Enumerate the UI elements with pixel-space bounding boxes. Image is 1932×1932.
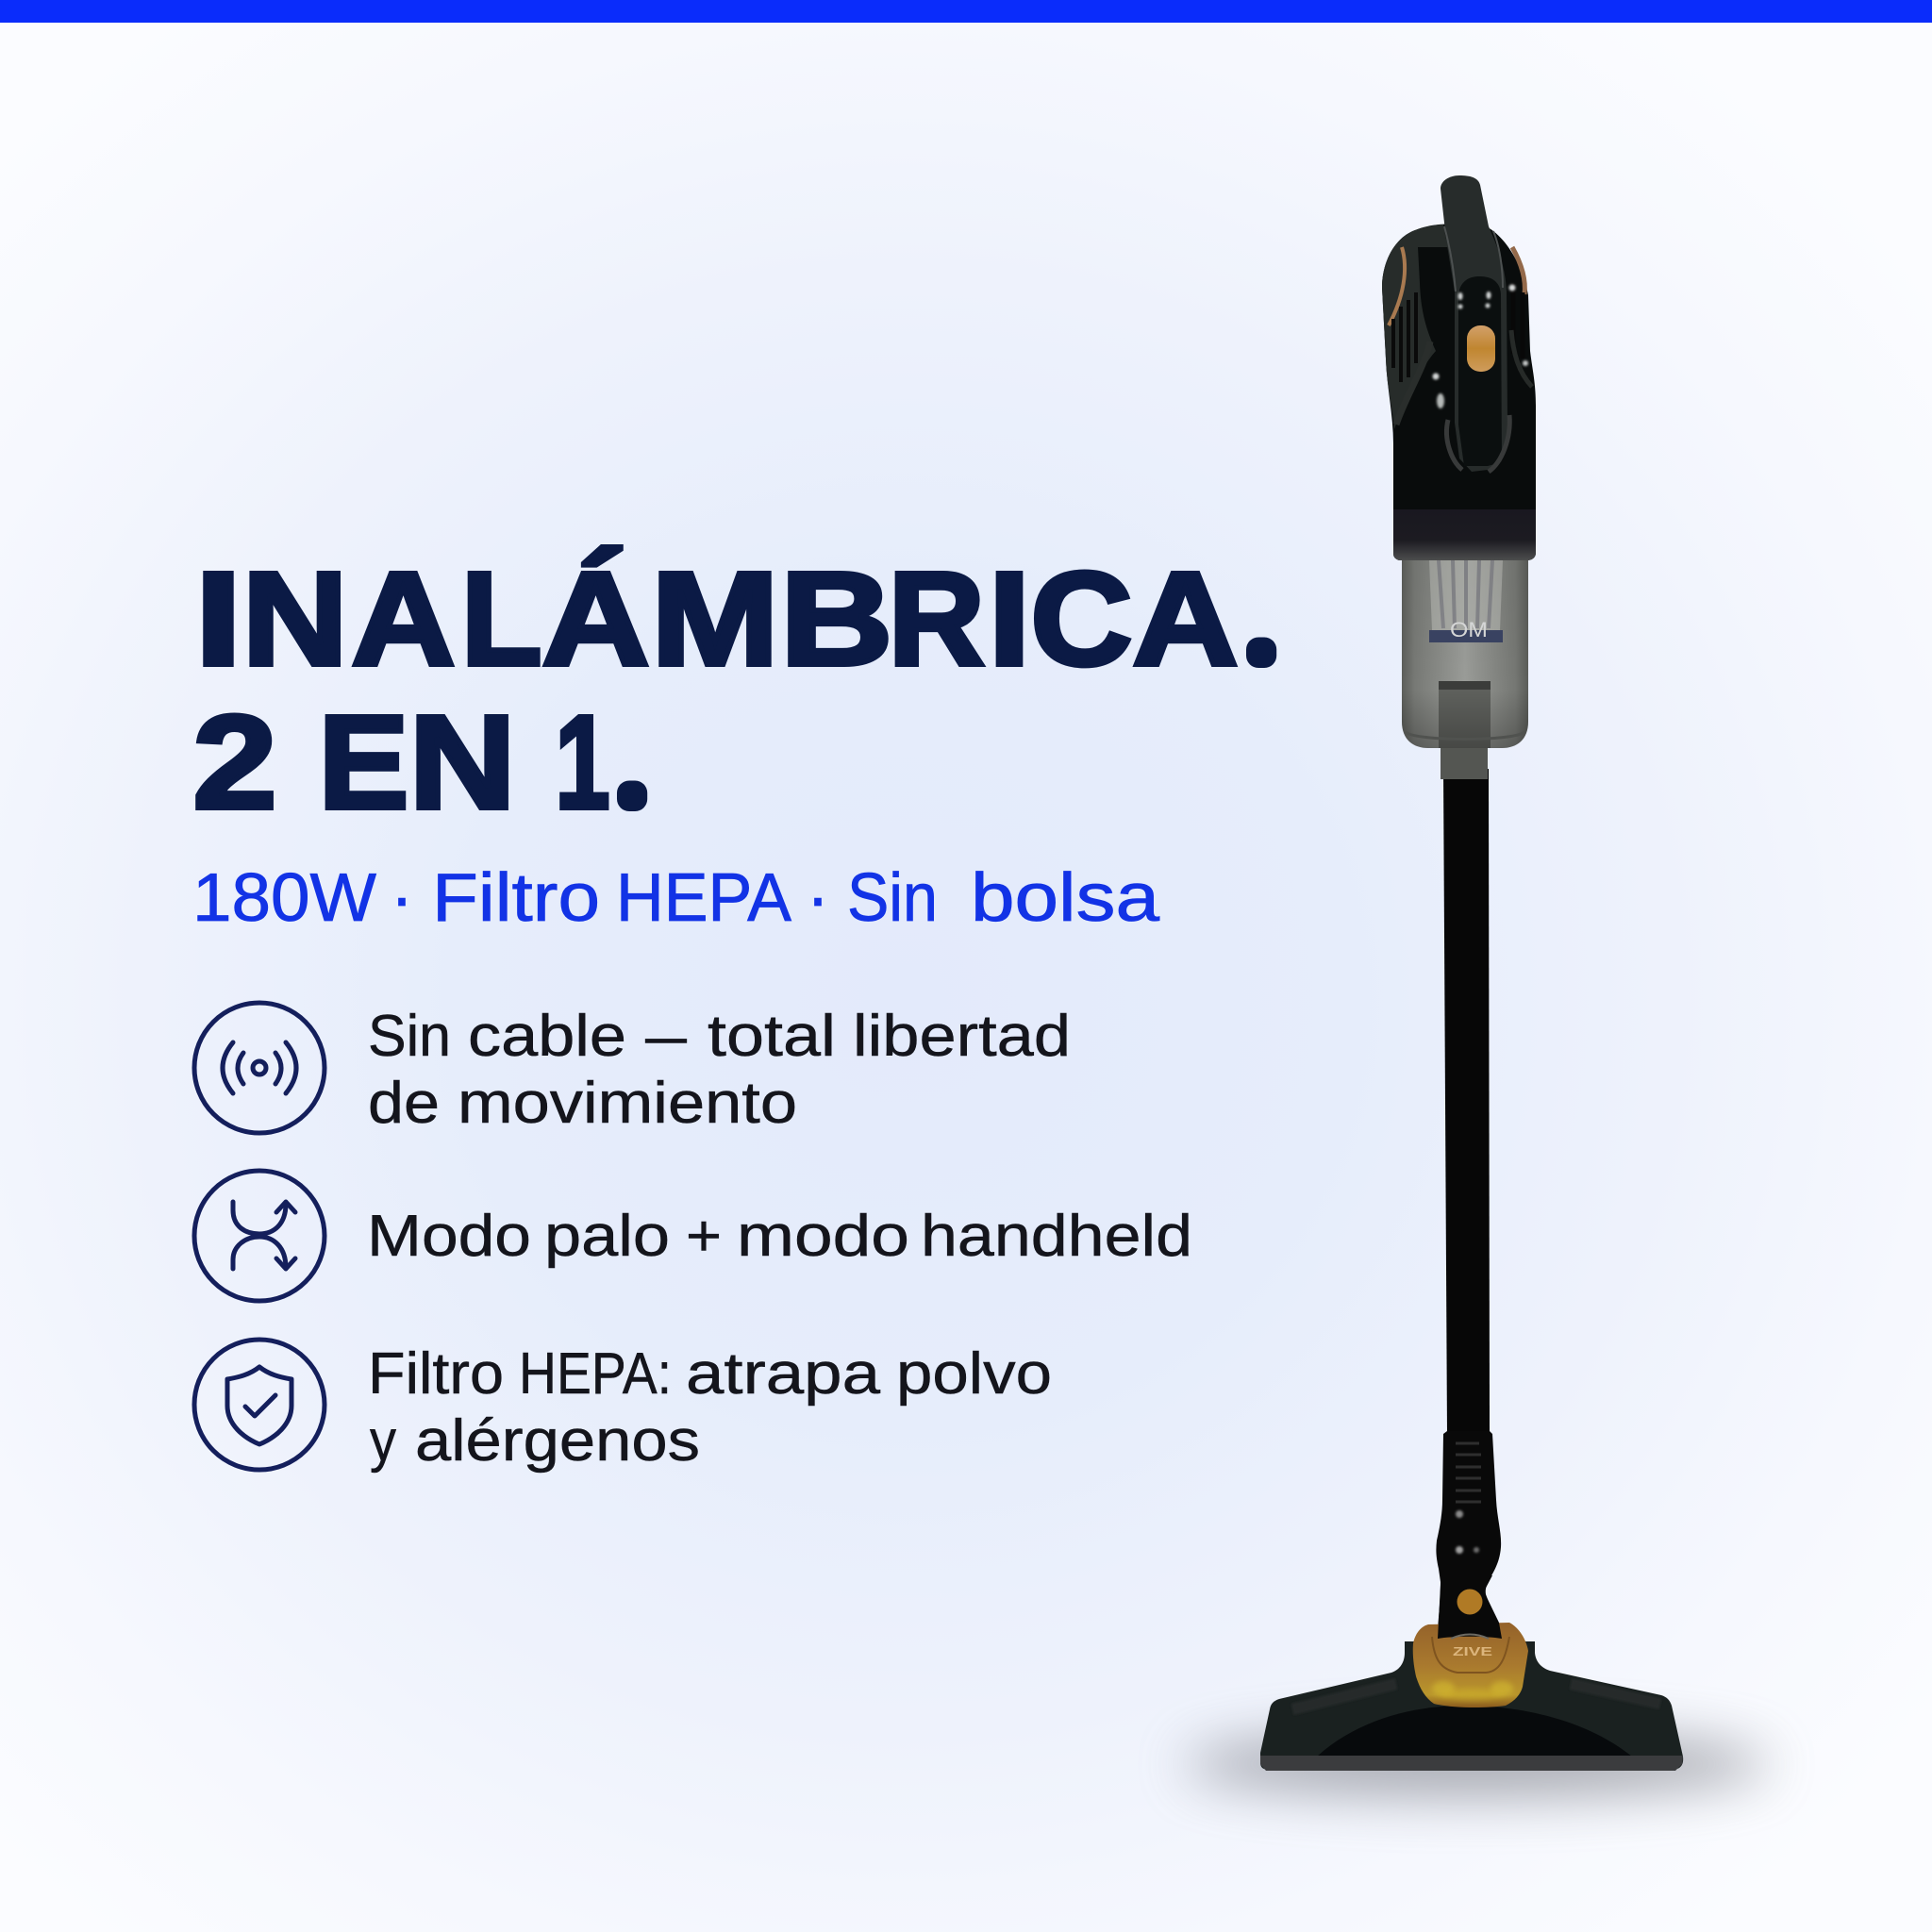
title: B: [780, 543, 892, 692]
feature text: libertad: [853, 1004, 1071, 1069]
title: N: [242, 543, 348, 692]
title: C: [1030, 543, 1132, 692]
feature text: total: [708, 1004, 836, 1069]
title: .: [1256, 619, 1267, 665]
feature text: —: [645, 1004, 687, 1069]
feature text: palo: [544, 1204, 670, 1269]
top bar: [0, 0, 1932, 23]
icon: wireless signal: [194, 1003, 325, 1133]
inner tube: [1441, 745, 1488, 779]
handle: [1441, 175, 1507, 472]
motor body: [1382, 175, 1536, 560]
feature: sin cable: [194, 1003, 1071, 1136]
title: L: [461, 543, 541, 692]
feature text: +: [686, 1204, 722, 1269]
icon: shield check: [194, 1340, 325, 1470]
gold head: ZIVE: [1453, 1644, 1492, 1658]
title: 1: [555, 687, 609, 836]
feature text: polvo: [896, 1341, 1052, 1407]
title: I: [989, 543, 1030, 692]
title: .: [626, 762, 638, 808]
gold knob: [1457, 1589, 1483, 1615]
feature text: alérgenos: [415, 1408, 700, 1474]
title: I: [194, 543, 242, 692]
feature text: modo: [737, 1204, 909, 1269]
title: [192, 543, 1267, 836]
subtitle: bolsa: [971, 860, 1160, 936]
power button: [1467, 325, 1495, 372]
feature: filtro hepa: [194, 1340, 1052, 1474]
title: 2: [192, 687, 277, 836]
feature text: Modo: [367, 1204, 531, 1269]
shaft collar and joint: [1436, 1431, 1501, 1646]
shaft: [1443, 769, 1490, 1434]
subtitle: ·: [807, 860, 829, 936]
feature text: de: [368, 1071, 440, 1136]
gold head: [1413, 1575, 1528, 1707]
vacuum cleaner: [1260, 175, 1683, 1771]
feature text: Filtro: [368, 1341, 504, 1407]
subtitle: Sin: [847, 860, 938, 936]
title: E: [319, 687, 408, 836]
title: R: [889, 543, 985, 692]
feature: dos modos: [194, 1171, 1192, 1301]
feature text: atrapa: [686, 1341, 881, 1407]
subtitle: Filtro: [432, 860, 600, 936]
floor shadow: [1184, 1732, 1769, 1796]
title: N: [409, 687, 516, 836]
nozzle: [1260, 1641, 1683, 1771]
feature text: movimiento: [458, 1071, 797, 1136]
subtitle: ·: [391, 860, 413, 936]
icon: crossing arrows: [194, 1171, 325, 1301]
dust cup: [1402, 557, 1528, 748]
title: Á: [541, 543, 649, 692]
title: M: [651, 543, 779, 692]
subtitle: 180W: [192, 860, 376, 936]
feature text: y: [370, 1408, 396, 1474]
title: A: [351, 543, 455, 692]
dust cup: OM: [1450, 618, 1488, 641]
feature text: HEPA:: [519, 1341, 672, 1407]
title: A: [1132, 543, 1238, 692]
feature text: cable: [468, 1004, 626, 1069]
subtitle: HEPA: [616, 860, 791, 936]
feature text: handheld: [921, 1204, 1192, 1269]
feature text: Sin: [368, 1004, 451, 1069]
